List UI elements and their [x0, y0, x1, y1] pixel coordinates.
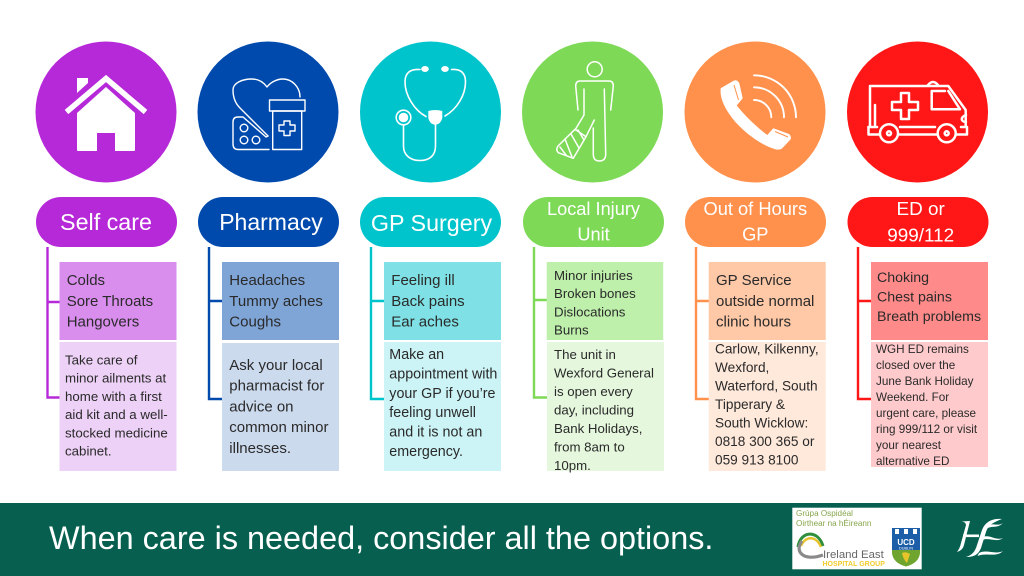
box: advice: alternative ED	[876, 455, 949, 468]
box: advice: Wexford,	[715, 360, 769, 375]
heading pill: out of hours GP: Out of Hours	[703, 198, 807, 219]
box: conditions: Coughs	[229, 314, 281, 331]
connector	[209, 247, 222, 399]
column: GP surgery	[360, 42, 501, 471]
box: conditions: Colds	[67, 272, 105, 289]
heading pill: out of hours GP	[685, 197, 826, 247]
heading pill: local injury unit	[523, 197, 664, 247]
box: conditions: outside normal	[716, 293, 814, 310]
connector	[48, 247, 60, 398]
box: advice: advice on	[229, 398, 294, 415]
box: conditions: clinic hours	[716, 314, 791, 331]
box: advice: is open every	[554, 384, 633, 399]
box: conditions: GP Service	[716, 272, 792, 289]
box: advice	[384, 342, 501, 471]
box: advice: Ask your local	[229, 357, 323, 374]
box: advice: your GP if you’re	[389, 386, 496, 402]
box: conditions	[60, 262, 176, 340]
heading pill: local injury unit: Local Injury	[547, 199, 641, 219]
box: advice: Take care of	[65, 352, 138, 368]
box: advice: day, including	[554, 402, 634, 418]
heading pill: GP surgery	[360, 197, 501, 247]
column: local injury unit	[522, 42, 664, 473]
box: conditions: Burns	[554, 323, 589, 338]
heading pill: pharmacy: Pharmacy	[219, 209, 323, 235]
icon: house	[36, 42, 176, 182]
box: advice: aid kit and a well-	[65, 407, 168, 422]
box: advice: cabinet.	[65, 444, 112, 458]
box: advice: 0818 300 365 or	[715, 434, 815, 449]
box: conditions	[384, 262, 501, 340]
box: conditions: Back pains	[391, 293, 465, 310]
box: advice: urgent care, please	[876, 407, 976, 420]
heading pill: ED or 999/112: ED or	[897, 199, 945, 220]
box: advice: 10pm.	[554, 458, 591, 473]
box: conditions	[547, 262, 663, 340]
box: advice: feeling unwell	[389, 405, 476, 421]
box: advice: WGH ED remains	[876, 343, 969, 356]
box: advice	[709, 341, 826, 471]
box: advice: 059 913 8100	[715, 452, 799, 467]
logo: Ireland East Hospital Group and UCD: Grúpa Ospidéal	[796, 509, 853, 518]
box: conditions: Minor injuries	[554, 268, 633, 283]
box: advice: and it is not an	[389, 425, 482, 441]
box: advice: illnesses.	[229, 440, 291, 457]
column: ED or 999/112	[847, 42, 988, 468]
heading pill: self care	[36, 197, 177, 247]
box: conditions: Chest pains	[877, 290, 952, 306]
connector	[534, 247, 547, 398]
box: advice: emergency.	[389, 444, 463, 460]
box: conditions: Sore Throats	[67, 293, 153, 310]
icon: heart, pills and bottle	[198, 42, 338, 182]
box: advice: Wexford General	[554, 366, 654, 380]
box: conditions: Breath problems	[877, 309, 981, 325]
connector	[371, 247, 384, 399]
logo: Ireland East Hospital Group and UCD: Ireland East	[823, 549, 885, 561]
box: advice: Carlow, Kilkenny,	[715, 341, 819, 356]
connector	[858, 247, 871, 399]
heading pill: pharmacy	[198, 197, 339, 247]
heading pill: ED or 999/112	[848, 197, 988, 247]
column: self care	[36, 42, 177, 471]
box: advice	[871, 342, 988, 468]
box: advice: Weekend. For	[876, 391, 949, 404]
box: conditions: Headaches	[229, 272, 305, 289]
box: advice: June Bank Holiday	[876, 375, 974, 388]
box: advice: Bank Holidays,	[554, 421, 642, 436]
logo: Ireland East Hospital Group and UCD: UCD	[897, 538, 915, 547]
box: advice: pharmacist for	[229, 378, 324, 395]
box: advice: Waterford, South	[715, 378, 818, 393]
box: conditions	[871, 262, 988, 340]
box: conditions: Choking	[877, 270, 929, 286]
box: conditions: Tummy aches	[229, 293, 323, 310]
box: advice: home with a first	[65, 389, 162, 404]
footer slogan: When care is needed, consider all the options.	[49, 520, 713, 556]
box: advice: common minor	[229, 419, 329, 436]
box: advice: Tipperary &	[715, 397, 785, 412]
logo: Ireland East Hospital Group and UCD: Oirthear na hÉireann	[796, 518, 871, 528]
heading pill: ED or 999/112: 999/112	[887, 226, 954, 247]
box: advice: minor ailments at	[65, 371, 167, 386]
box: advice: South Wicklow:	[715, 415, 808, 430]
icon: stethoscope	[360, 42, 501, 182]
logo: Ireland East Hospital Group and UCD: DUBLIN	[899, 546, 913, 550]
footer band	[0, 503, 1024, 576]
logo: HSE	[957, 519, 1003, 557]
box: advice	[60, 342, 176, 471]
box: advice: stocked medicine	[65, 425, 168, 440]
box: advice: appointment with	[389, 366, 497, 382]
icon: person with leg cast	[522, 42, 663, 182]
heading pill: self care: Self care	[60, 209, 152, 235]
heading pill: out of hours GP: GP	[742, 224, 769, 245]
box: advice: Make an	[389, 347, 444, 363]
box: advice	[547, 342, 664, 473]
box: advice: The unit in	[554, 347, 616, 362]
logo: Ireland East Hospital Group and UCD	[792, 508, 922, 569]
column: pharmacy	[198, 42, 339, 471]
box: advice: closed over the	[876, 359, 955, 372]
box: conditions	[222, 262, 339, 340]
icon: telephone handset	[684, 42, 826, 182]
box: conditions: Feeling ill	[391, 272, 455, 289]
heading pill: GP surgery: GP Surgery	[371, 210, 492, 236]
heading pill: local injury unit: Unit	[577, 225, 610, 245]
box: advice	[222, 343, 339, 471]
box: advice: ring 999/112 or visit	[876, 423, 978, 436]
column: out of hours GP	[684, 42, 826, 471]
box: conditions: Broken bones	[554, 286, 636, 301]
box: conditions	[709, 262, 826, 340]
box: advice: your nearest	[876, 439, 942, 452]
box: conditions: Ear aches	[391, 314, 459, 331]
icon: ambulance	[847, 42, 988, 182]
box: conditions: Hangovers	[67, 314, 139, 331]
connector	[696, 247, 709, 399]
logo: Ireland East Hospital Group and UCD: HOSPITAL GROUP	[822, 561, 885, 568]
box: advice: from 8am to	[554, 440, 625, 454]
box: conditions: Dislocations	[554, 304, 626, 319]
